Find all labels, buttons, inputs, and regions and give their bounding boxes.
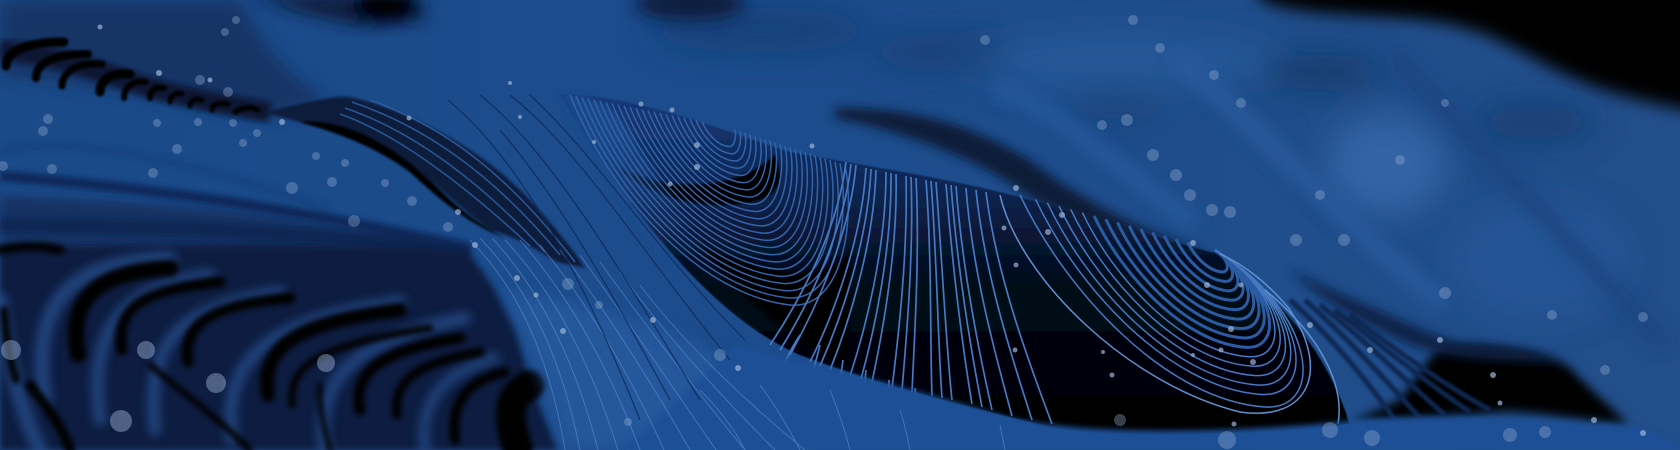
fibres on blue xyxy=(1290,300,1490,420)
right cloud streaks xyxy=(1000,60,1660,340)
top left swirl xyxy=(0,0,330,118)
band fill xyxy=(262,97,585,268)
pocket fill xyxy=(1352,345,1628,424)
right black pocket and fibres xyxy=(1290,270,1628,424)
swirl dark fill xyxy=(0,244,558,450)
top left dark band xyxy=(0,50,270,112)
left flank fade xyxy=(560,94,720,290)
swirl lit arcs xyxy=(0,258,495,450)
fan lower black pool xyxy=(700,245,850,365)
left mid dark streaks xyxy=(0,146,470,252)
band black core xyxy=(300,122,505,238)
right cloud shading xyxy=(650,8,1630,320)
bottom ribbon edge xyxy=(620,345,1680,450)
centre fan lines xyxy=(770,162,1052,448)
swirl black arcs xyxy=(0,247,530,450)
central fan dark region xyxy=(560,94,1349,448)
top dark patches xyxy=(250,0,745,26)
lower left swirl xyxy=(0,244,558,450)
ribbon fine fibres xyxy=(470,238,1005,450)
right nested arcs xyxy=(1094,216,1270,347)
dark wisp xyxy=(1290,270,1560,362)
top left black stripes xyxy=(6,42,258,112)
outer swirl lines xyxy=(1000,195,1339,424)
fan fill xyxy=(560,94,1349,435)
dark upper blurred band xyxy=(835,108,1212,254)
light ribbon patch xyxy=(500,290,820,450)
left nested arcs xyxy=(570,95,848,305)
left swirl black xyxy=(615,155,780,205)
top left shade xyxy=(0,0,330,118)
band lines xyxy=(340,100,575,262)
large soft particles xyxy=(1,340,335,432)
right outer arcs xyxy=(1020,195,1303,407)
ribbon dark fibres xyxy=(448,95,745,420)
top right black corner xyxy=(1250,0,1680,112)
dark curved band xyxy=(262,97,585,268)
dark wedge xyxy=(0,196,470,252)
